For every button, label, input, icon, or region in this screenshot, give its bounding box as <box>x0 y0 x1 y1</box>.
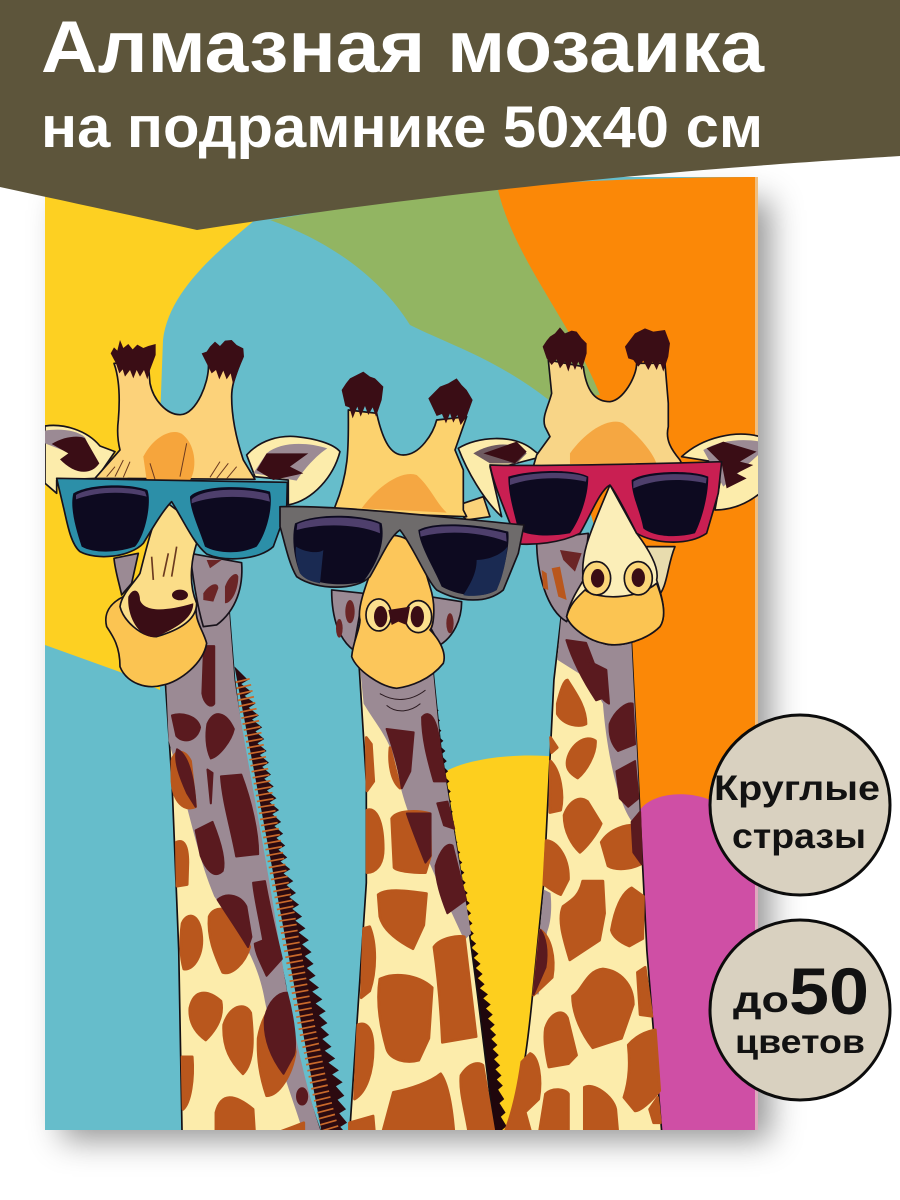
left cheek <box>332 590 363 650</box>
subtitle: на подрамнике 50х40 см <box>41 95 763 160</box>
nostrils <box>366 599 432 633</box>
left cheek <box>537 533 588 622</box>
left ear <box>458 439 542 517</box>
canvas shadow <box>50 190 758 1130</box>
giraffe head: left, blue sunglasses <box>45 340 340 687</box>
nostrils <box>128 591 193 637</box>
giraffe head: middle, grey sunglasses <box>280 372 524 688</box>
head top and horns <box>95 340 255 480</box>
background colour shapes <box>45 177 758 1130</box>
grey sunglasses <box>280 506 524 600</box>
giraffe head: right, red sunglasses <box>458 327 760 645</box>
neck: left giraffe <box>156 602 348 1136</box>
right ear fragment <box>462 496 491 520</box>
blue sunglasses <box>57 478 287 559</box>
head top and horns <box>333 372 473 517</box>
giraffe necks <box>156 602 662 1136</box>
badge: up to 50 colours: цветов <box>735 1023 865 1060</box>
muzzle yellow <box>567 583 664 645</box>
badge: round rhinestones: стразы <box>732 817 866 856</box>
header banner <box>0 0 900 230</box>
canvas: giraffes painting <box>45 177 760 1136</box>
right nostril <box>172 590 188 600</box>
left ear <box>45 425 115 493</box>
badge: round rhinestones <box>710 715 890 895</box>
right cheek <box>430 597 462 645</box>
badge: up to 50 colours: 50 <box>789 954 869 1028</box>
badge: round rhinestones: Круглые <box>714 769 880 808</box>
muzzle <box>106 587 207 687</box>
title: Алмазная мозаика <box>41 7 766 88</box>
cheek markings <box>542 550 582 600</box>
muzzle <box>352 535 444 688</box>
badge: up to 50 colours <box>710 920 890 1100</box>
red sunglasses <box>490 462 722 544</box>
right ear <box>682 434 760 510</box>
right ear <box>247 436 340 505</box>
cheek spots <box>336 600 454 638</box>
right cheek <box>190 553 242 627</box>
neck: middle giraffe <box>349 646 507 1136</box>
left cheek <box>114 553 138 595</box>
head top and horns <box>533 327 683 467</box>
cheek spots <box>203 560 238 603</box>
neck: right giraffe <box>503 612 662 1136</box>
nose lines <box>152 547 177 580</box>
nose and muzzle <box>567 485 664 645</box>
badge: up to 50 colours: до <box>733 979 789 1020</box>
nose bridge <box>120 500 197 637</box>
right cheek <box>647 547 675 598</box>
nostrils <box>583 562 652 595</box>
